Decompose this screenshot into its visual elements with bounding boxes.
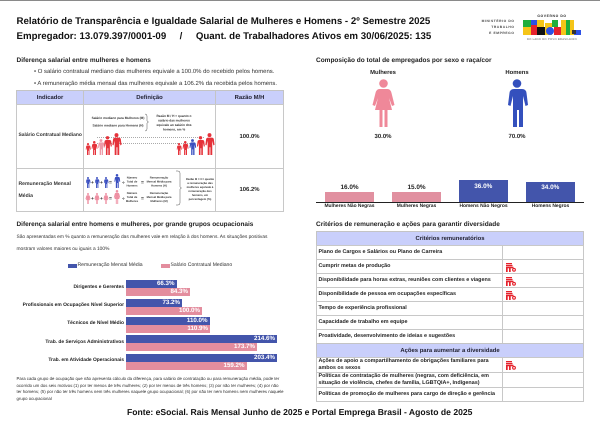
government logo: DO LADO DO POVO BRASILEIRO [527,38,577,41]
row: hiring policies: Políticas de contratação de mulheres (negras, com deficiência, em [318,373,489,379]
row: promotion policies [316,387,503,402]
ministry logo text: E EMPREGO [489,31,514,35]
diagram: mean pay definition: + [91,196,94,202]
row: production goals [316,259,503,274]
diagram: mean pay definition: ÷ [122,196,125,202]
government logo [523,14,581,41]
icon: woman [372,79,394,127]
value: 15.0%: 15.0% [407,184,426,191]
diagram: mean pay definition: = [109,180,112,186]
table header: ratio [215,90,284,105]
table header: indicator: Indicador [37,94,63,100]
row: family obligations [316,357,503,373]
bar: black women [392,192,441,202]
row: overtime availability [316,273,503,288]
group: operational: Trab. em Atividade Operacionais [48,358,124,362]
group: professionals: Profissionais em Ocupações Nível Superior [23,303,124,308]
row: career plan: Plano de Cargos e Salários ou Plano de Carreira [318,249,442,255]
heading: occupational groups: Diferença salarial entre homens e mulheres, por grande grupos ocupacionais [16,220,253,228]
row: specific occupations [316,287,503,302]
ministry logo text [482,19,514,35]
label: women not black: Mulheres Não Negras [324,204,374,209]
row: promotion policies: Políticas de promoção de mulheres para cargo de direção e gerência [318,391,495,397]
bullet 1: • O salário contratual mediano das mulheres equivale a 100.0% do recebido pelos homens. [34,69,274,75]
footnote: ocorrido um dos seis motivos:(1) por ter menos de três mulheres; (2) por ter menos de três homens; (3) por não ter mulheres; (4) por não [16,383,278,388]
diagram: mean pay definition [86,170,214,206]
header: diversity actions [316,343,584,358]
baseline [316,202,584,203]
header: pay criteria [316,231,584,246]
bar chart: race and sex composition [316,180,584,209]
description text: São apresentadas em % quanto a remuneração das mulheres vale em relação à dos homens. As situações positivas [16,235,267,240]
ministry logo text: MINISTÉRIO DO [482,19,514,23]
row 2 indicator: Remuneração Mensal [18,181,71,187]
horizontal bar chart: occupational groups: 110.9% [187,325,208,332]
label: women: Mulheres [370,70,396,76]
ministry logo text: TRABALHO [491,25,514,29]
panel: criteria table [316,231,584,402]
diagram: mean pay definition: Homens (H) [151,184,167,188]
row: specific occupations: Disponibilidade de pessoa em ocupações específicas [318,291,456,297]
value: women: 30.0% [374,134,392,140]
source line: Fonte: eSocial. Rais Mensal Junho de 2025 e Portal Emprega Brasil - Agosto de 2025 [127,406,472,416]
government logo: GOVERNO DO [537,14,567,18]
women figure group [370,70,396,140]
heading: composition: Composição do total de empregados por sexo e raça/cor [316,56,492,64]
table header: definition [83,90,216,105]
footnote: grupo ocupacional [16,396,52,401]
horizontal bar chart: occupational groups: 159.2% [224,362,244,368]
row 1 indicator: Salário Contratual Mediano [18,133,82,138]
horizontal bar chart: occupational groups: 203.4% [254,354,275,360]
diagram: mean pay definition: Mulheres (M) [150,199,168,203]
row: career plan [316,245,503,260]
legend: Remuneração Mensal Média [78,262,143,268]
diagram: mean pay definition: porcentagem (%) [189,197,211,201]
panel: indicator table [16,90,284,212]
group: technicians: Técnicos de Nível Médio [67,321,124,326]
row: family obligations: Ações de apoio a compartilhamento de obrigações familiares para [318,358,489,364]
table header: ratio: Razão M/H [235,94,264,100]
diagram: mean pay definition: Número [127,176,138,180]
legend: median salary [161,264,170,268]
bar: women not black [325,192,374,202]
footnote: Para cada grupo de ocupação que não apresenta cálculo da diferença, para salário de contratação ou para remuneração média, pode ter [16,376,279,381]
footnote: ter homens; (5) por não ter três homens nem três mulheres naquele grupo ocupacional; (6) por não ter nem homens nem mulheres naquele [16,389,284,394]
diagram: mean pay definition: a remuneração das [187,181,213,185]
row 1 ratio value [215,104,284,169]
diagram: median salary definition: equivale ao salário dos [156,123,192,127]
header: pay criteria: Critérios remuneratórios [415,236,485,242]
diagram: mean pay definition: Homens [126,184,138,188]
diagram: mean pay definition: Remuneração [150,191,169,195]
diagram: mean pay definition: Razão M / H = quanto [186,177,214,181]
horizontal bar chart: occupational groups [22,280,277,370]
bar: black men [526,182,574,202]
legend: mean pay [68,264,76,268]
bar: men not black [459,180,508,202]
label: men: Homens [505,70,529,76]
men figure group [505,70,529,140]
diagram: mean pay definition: remuneração dos [188,189,212,193]
row: experience: Tempo de experiência profissional [318,305,407,311]
group: managers: Dirigentes e Gerentes [73,285,124,290]
diagram: mean pay definition: Remuneração [150,176,169,180]
row: proactivity: Proatividade, desenvolvimento de ideias e sugestões [318,333,455,339]
heading: criteria: Critérios de remuneração e ações para garantir diversidade [316,220,500,228]
row: hiring policies [316,372,503,388]
row 2 ratio value [215,168,284,212]
diagram: mean pay definition: + [100,180,103,186]
diagram: median salary definition: Salário mediano para Mulheres (M) [92,116,144,120]
diagram: mean pay definition: Mulheres [126,199,139,203]
horizontal bar chart: occupational groups: 73.2% [162,299,180,306]
diagram: mean pay definition: + [100,196,103,202]
row: overtime availability: Disponibilidade para horas extras, reuniões com clientes e viagens [318,277,491,283]
row: teamwork [316,315,503,330]
diagram: median salary definition: Salário mediano para Homens (H) [92,124,144,128]
diagram: mean pay definition: mulheres equivale à [187,185,214,189]
description text: mostram valores maiores ou iguais a 100% [16,247,109,252]
diagram: mean pay definition: Número [127,191,138,195]
group: administrative: Trab. de Serviços Administrativos [45,340,124,344]
label: black women: Mulheres Negras [397,204,436,209]
row 1 ratio value: 100.0% [240,134,259,140]
diagram: mean pay definition: Mensal Média para [147,195,172,199]
value: 16.0%: 16.0% [340,184,359,190]
diagram: mean pay definition: Mensal Média para [147,180,172,184]
diagram: mean pay definition: = [141,180,144,186]
row: production goals: Cumprir metas de produção [318,263,390,269]
employer line: Empregador: 13.079.397/0001-09 / Quant. de Trabalhadores Ativos em 30/06/2025: 135 [16,31,431,42]
diagram: median salary definition: salário das mulheres [158,118,190,122]
icon: man [508,79,528,127]
header: diversity actions: Ações para aumentar a diversidade [400,348,500,354]
row 1 definition [83,104,216,169]
horizontal bar chart: occupational groups: 100.0% [179,307,200,314]
horizontal bar chart: occupational groups: 214.6% [254,335,275,342]
diagram: median salary definition [86,114,214,155]
row 2 ratio value: 106.2% [240,187,259,193]
row: teamwork: Capacidade de trabalho em equipe [318,319,407,325]
diagram: mean pay definition: = [109,196,112,202]
top border line [0,0,600,1]
bar: men not black: 36.0% [474,183,492,190]
row 2 indicator [16,168,84,212]
diagram: median salary definition: homens, em % [163,128,185,132]
bar: black men: 34.0% [541,184,559,191]
footnote [16,376,284,401]
diagram: mean pay definition: Total de [127,180,138,184]
description text [16,234,268,252]
row: family obligations: ambos os sexos [318,365,360,371]
table header: indicator [16,90,84,105]
diagram: mean pay definition: ÷ [122,180,125,186]
value: men: 70.0% [508,134,526,140]
row: proactivity [316,329,503,344]
row 1 indicator [16,104,84,169]
legend [68,262,232,268]
bullet 2: • A remuneração média mensal das mulheres equivale a 106.2% da recebida pelos homens. [34,80,277,86]
row: experience [316,301,503,316]
heading: salary difference: Diferença salarial entre mulheres e homens [16,56,151,64]
row 2 definition [83,168,216,212]
label: men not black: Homens Não Negros [459,204,508,209]
diagram: mean pay definition: homens, em [192,193,209,197]
horizontal bar chart: occupational groups: 173.7% [234,343,255,350]
horizontal bar chart: occupational groups: 84.3% [170,288,188,295]
horizontal bar chart: occupational groups: 66.3% [157,280,174,287]
horizontal bar chart: occupational groups: 110.0% [187,317,208,324]
diagram: mean pay definition: = [141,196,144,202]
legend: Salário Contratual Mediano [170,262,232,268]
row: hiring policies: situação de violência, chefes de família, LGBTQIA+, Indígenas) [318,380,480,386]
title: Relatório de Transparência e Igualdade Salarial de Mulheres e Homens - 2º Semestre 2025 [16,16,430,27]
label: black men: Homens Negros [532,204,569,209]
diagram: mean pay definition: + [91,180,94,186]
diagram: mean pay definition: Total de [127,195,138,199]
row 2 indicator: Média [18,193,33,199]
table header: definition: Definição [136,94,163,100]
diagram: median salary definition: Razão M / H = quanto o [157,114,192,118]
